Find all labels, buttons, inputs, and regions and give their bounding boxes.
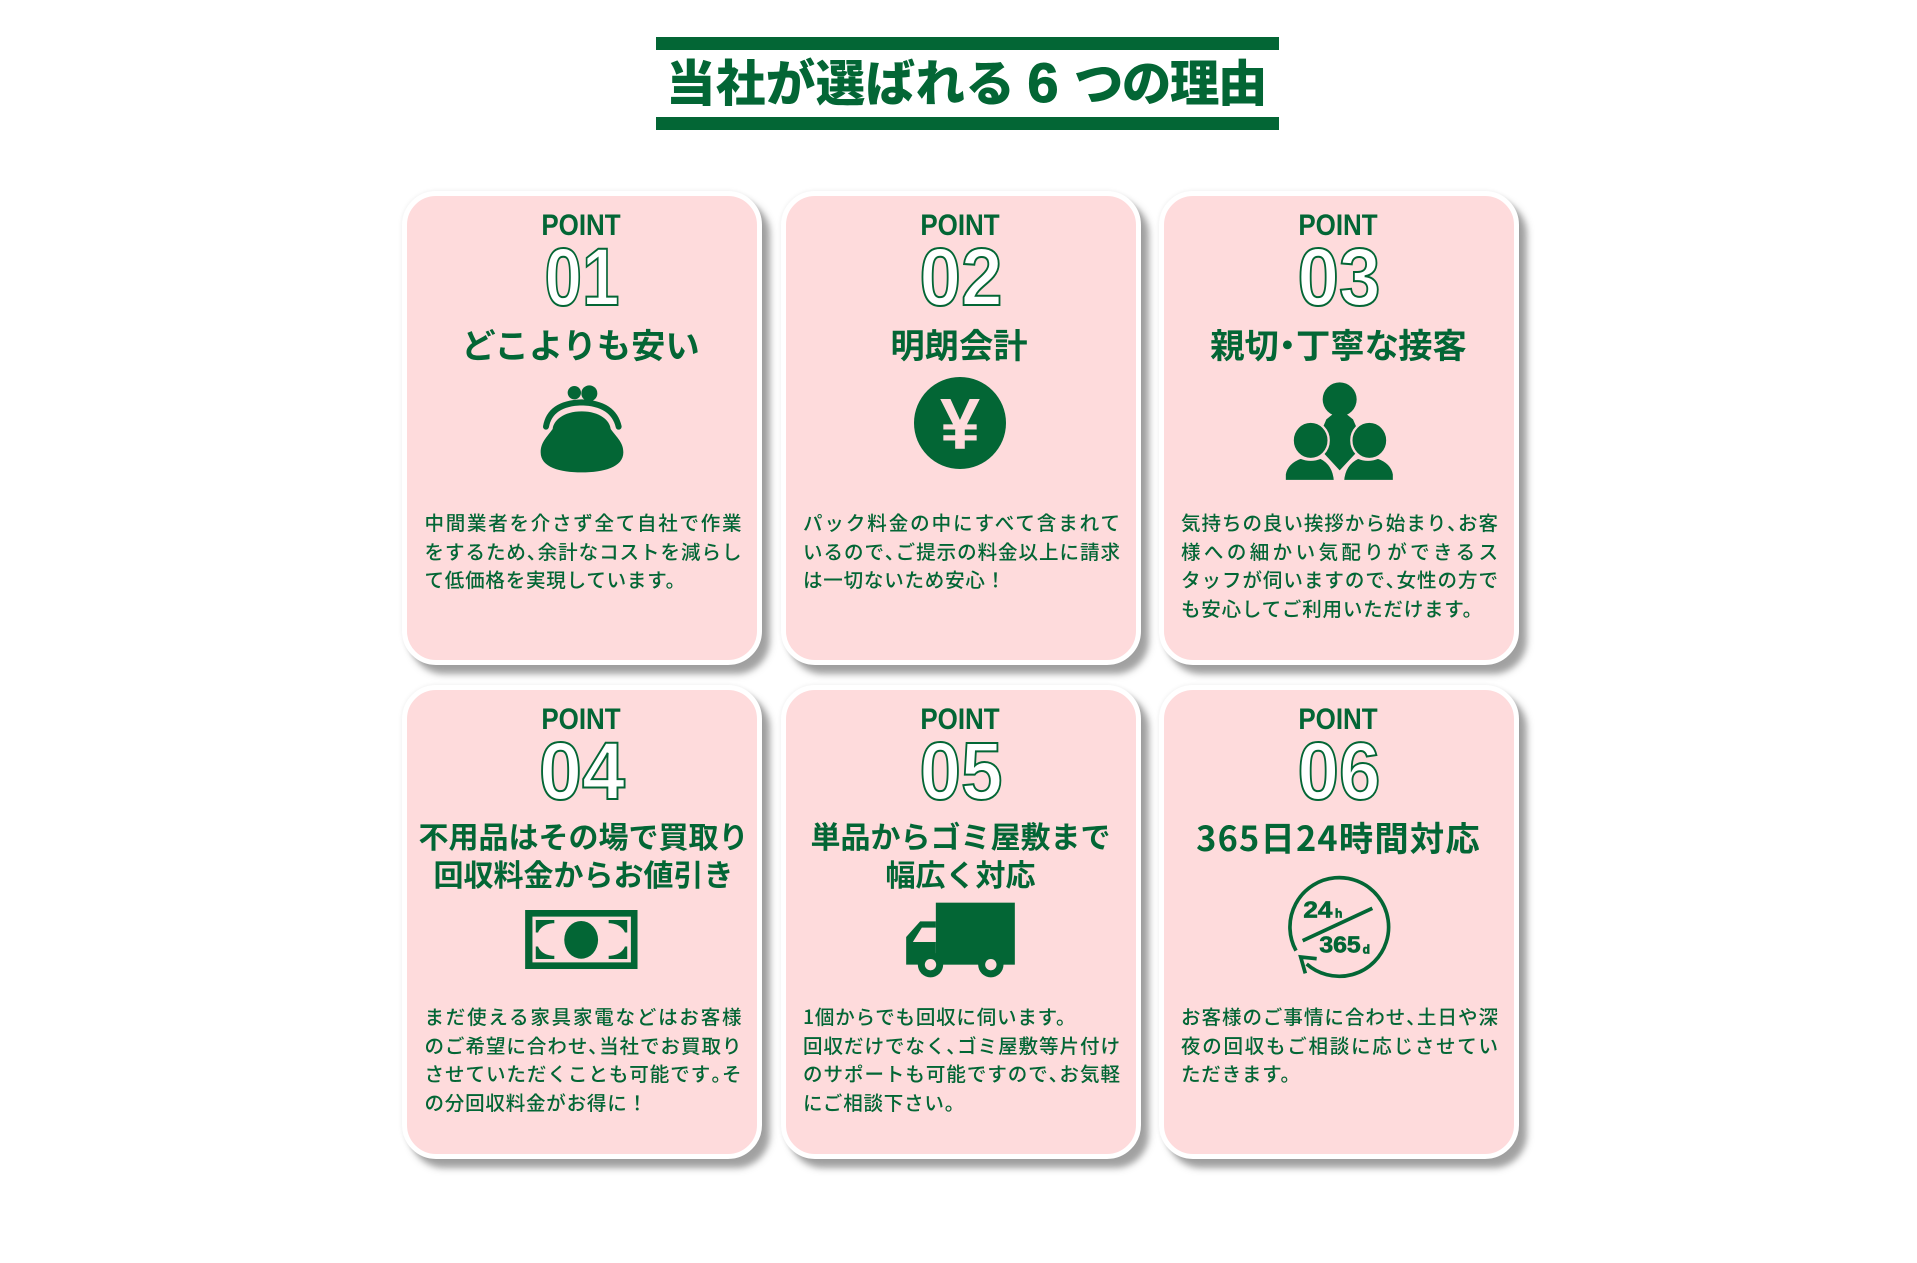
heading: 365日24時間対応: [1196, 811, 1481, 861]
description: にご相談下さい。: [803, 1086, 965, 1116]
icon: 24h 365d clock: h: [1334, 906, 1342, 920]
description: [424, 1001, 742, 1116]
title: 当社が選ばれる6 つの理由: [666, 45, 1266, 116]
number 04: 04: [539, 726, 625, 816]
number 01: 01: [544, 232, 620, 322]
point label: POINT: [920, 703, 999, 736]
description: いるので、ご提示の料金以上に請求: [803, 536, 1120, 564]
panel: point 05: [780, 685, 1140, 1159]
description: の分回収料金がお得に！: [424, 1086, 648, 1116]
description: て低価格を実現しています。: [424, 564, 686, 593]
number 06: 06: [1298, 726, 1380, 816]
description: 中間業者を介さず全て自社で作業: [424, 507, 742, 536]
description: パック料金の中にすべて含まれて: [803, 507, 1120, 536]
point label: POINT: [541, 703, 621, 736]
icon: three people: [1286, 382, 1393, 480]
heading: 親切・丁寧な接客: [1210, 318, 1467, 368]
icon: yen coin: ¥: [939, 385, 980, 465]
heading: どこよりも安い: [461, 318, 700, 368]
heading: [418, 813, 748, 895]
panel: point 03: [1159, 191, 1519, 665]
description: は一切ないため安心！: [803, 564, 1006, 593]
description: [424, 507, 742, 593]
description: [803, 507, 1120, 593]
description: 1個からでも回収に伺います。: [803, 1001, 1076, 1030]
heading: 回収料金からお値引き: [434, 851, 734, 895]
icon: banknote: [525, 910, 638, 969]
description: 様への細かい気配りができるス: [1181, 536, 1498, 564]
description: [1181, 507, 1498, 622]
icon: truck: [906, 902, 1015, 978]
heading: 幅広く対応: [886, 851, 1036, 895]
icon: 24h 365d clock: [1288, 876, 1390, 978]
description: お客様のご事情に合わせ、土日や深: [1181, 1001, 1498, 1030]
icon: 24h 365d clock: 365: [1319, 932, 1360, 958]
description: [803, 1001, 1120, 1116]
description: のご希望に合わせ、当社でお買取り: [424, 1030, 741, 1058]
panel: point 01: [402, 191, 762, 665]
title banner: [656, 37, 1279, 130]
icon: 24h 365d clock: 24: [1303, 896, 1332, 922]
description: させていただくことも可能です。そ: [424, 1058, 741, 1087]
description: タッフが伺いますので、女性の方で: [1181, 564, 1498, 593]
panel: point 06: [1159, 685, 1519, 1159]
icon: yen coin: [914, 377, 1006, 469]
heading: 単品からゴミ屋敷まで: [810, 813, 1110, 857]
point label: POINT: [1298, 703, 1378, 736]
description: まだ使える家具家電などはお客様: [424, 1001, 742, 1030]
icon: 24h 365d clock: d: [1362, 942, 1370, 956]
description: 気持ちの良い挨拶から始まり、お客: [1181, 507, 1498, 536]
heading: 不用品はその場で買取り: [418, 813, 748, 857]
description: のサポートも可能ですので、お気軽: [803, 1058, 1120, 1087]
description: ただきます。: [1181, 1058, 1301, 1087]
point label: POINT: [920, 209, 999, 242]
number 03: 03: [1298, 232, 1380, 322]
point label: POINT: [541, 209, 621, 242]
heading: [810, 813, 1110, 895]
panel: point 02: [780, 191, 1140, 665]
heading: 明朗会計: [890, 318, 1028, 368]
point label: POINT: [1298, 209, 1378, 242]
description: [1181, 1001, 1498, 1087]
number 02: 02: [919, 232, 1002, 322]
description: も安心してご利用いただけます。: [1181, 592, 1483, 622]
description: 回収だけでなく、ゴミ屋敷等片付け: [803, 1030, 1120, 1058]
panel: point 04: [402, 685, 762, 1159]
description: をするため、余計なコストを減らし: [424, 536, 741, 564]
number 05: 05: [919, 726, 1002, 816]
description: 夜の回収もご相談に応じさせてい: [1181, 1030, 1498, 1058]
icon: coin purse: [540, 385, 624, 472]
